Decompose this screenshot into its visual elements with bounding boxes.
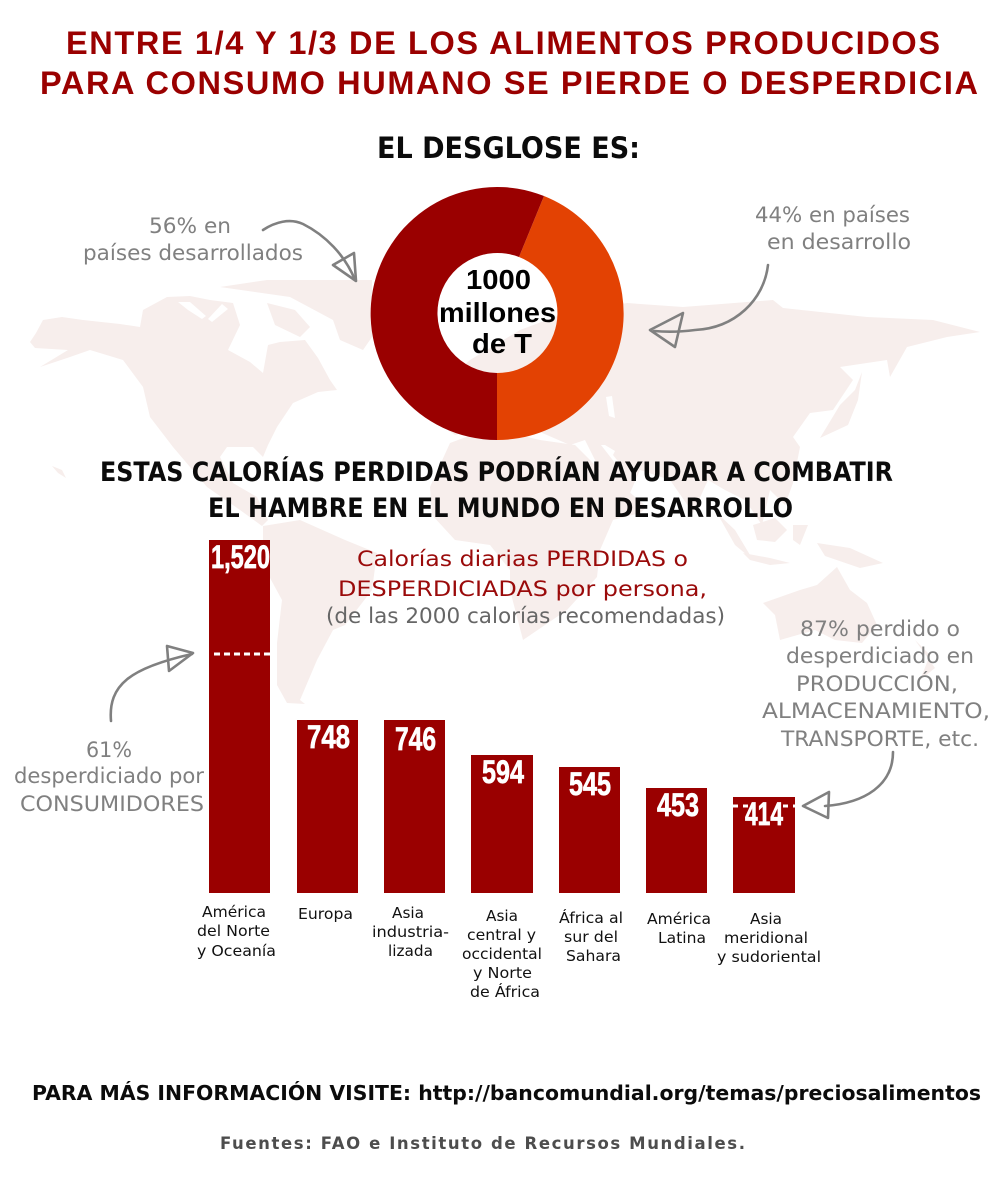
bar: Asia central y occidental y Norte de África <box>462 754 542 1001</box>
callout: 87%: ALMACENAMIENTO, <box>762 699 990 723</box>
chart subtitle: (de las 2000 calorías recomendadas) <box>326 604 725 628</box>
callout: 44%: en desarrollo <box>767 230 911 254</box>
bar: Europa <box>297 719 358 923</box>
callout: 44% <box>755 203 911 254</box>
bar chart <box>197 539 821 1001</box>
title: PARA CONSUMO HUMANO SE PIERDE O DESPERDICIA <box>40 65 978 101</box>
bar: Asia industrializada: industria- <box>372 923 449 941</box>
bar: América Latina: América <box>647 910 711 928</box>
bar: América Latina: Latina <box>658 929 706 947</box>
bar: Asia central y occidental y Norte de África: Asia <box>486 907 518 925</box>
chart subtitle <box>326 547 725 628</box>
callout: 61%: 61% <box>86 738 132 762</box>
bar: América del Norte y Oceanía <box>197 539 276 960</box>
title: ENTRE 1/4 Y 1/3 DE LOS ALIMENTOS PRODUCIDOS <box>66 25 940 61</box>
bar: Asia meridional y sudoriental <box>717 796 821 966</box>
callout: 87%: PRODUCCIÓN, <box>796 671 958 696</box>
callout: 61%: desperdiciado por <box>14 764 204 788</box>
donut center text: 1000 <box>466 264 531 295</box>
arrow: to donut left <box>263 221 356 281</box>
bar: Asia central y occidental y Norte de África: de África <box>470 982 540 1001</box>
bar: América del Norte y Oceanía: del Norte <box>197 922 270 940</box>
bar: África al sur del Sahara: África al <box>559 908 623 927</box>
donut center text: de T <box>472 328 532 359</box>
heading: calorías: ESTAS CALORÍAS PERDIDAS PODRÍAN AYUDAR A COMBATIR <box>100 456 893 488</box>
callout: 87% <box>762 617 990 751</box>
callout: 87%: desperdiciado en <box>786 644 974 668</box>
bar: Asia central y occidental y Norte de África: occidental <box>462 945 542 963</box>
bar: Asia central y occidental y Norte de África: y Norte <box>473 964 532 982</box>
bar: América del Norte y Oceanía: América <box>202 903 266 921</box>
heading: calorías: EL HAMBRE EN EL MUNDO EN DESARROLLO <box>208 493 793 524</box>
callout: 87%: 87% perdido o <box>800 617 960 641</box>
callout: 61%: CONSUMIDORES <box>20 792 204 816</box>
bar: América Latina <box>646 787 711 947</box>
footer link: PARA MÁS INFORMACIÓN VISITE: http://bancomundial.org/temas/preciosalimentos <box>32 1080 981 1105</box>
bar: Asia meridional y sudoriental: 414 <box>745 796 783 832</box>
bar: Asia central y occidental y Norte de África: 594 <box>482 754 524 790</box>
bar: África al sur del Sahara: sur del <box>564 928 618 946</box>
bar: Asia central y occidental y Norte de África: central y <box>467 926 536 944</box>
bar: Europa: 748 <box>307 719 350 755</box>
bar: Asia industrializada: Asia <box>392 904 424 922</box>
bar: América Latina: 453 <box>657 787 699 823</box>
donut chart <box>371 187 624 440</box>
bar: Asia meridional y sudoriental: y sudoriental <box>717 948 821 966</box>
arrow: to first bar <box>111 646 193 721</box>
bar: América del Norte y Oceanía: 1,520 <box>211 539 270 575</box>
bar: Asia industrializada: 746 <box>395 721 436 757</box>
callout: 56% <box>83 214 303 265</box>
bar: Asia meridional y sudoriental: meridional <box>724 929 808 947</box>
heading: calorías <box>100 456 893 524</box>
sources: Fuentes: FAO e Instituto de Recursos Mundiales. <box>220 1134 745 1153</box>
bar: Asia meridional y sudoriental: Asia <box>750 910 782 928</box>
callout: 87%: TRANSPORTE, etc. <box>780 727 979 751</box>
callout: 61% <box>14 738 204 816</box>
bar: África al sur del Sahara: 545 <box>569 766 611 802</box>
callout: 44%: 44% en países <box>755 203 910 227</box>
bar: América del Norte y Oceanía: y Oceanía <box>197 942 276 960</box>
title <box>40 25 978 101</box>
callout: 56%: países desarrollados <box>83 241 303 265</box>
world map background <box>30 280 980 704</box>
bar: Asia industrializada <box>372 720 449 960</box>
donut center text: millones <box>439 297 556 328</box>
bar: África al sur del Sahara <box>559 766 623 965</box>
donut center text <box>439 264 556 359</box>
chart subtitle: Calorías diarias PERDIDAS o <box>357 547 688 571</box>
bar: África al sur del Sahara: Sahara <box>566 947 621 965</box>
heading: el desglose: EL DESGLOSE ES: <box>377 131 640 165</box>
arrow: to last bar <box>803 752 893 818</box>
callout: 56%: 56% en <box>149 214 231 238</box>
bar: Europa: Europa <box>298 905 353 923</box>
chart subtitle: DESPERDICIADAS por persona, <box>338 577 707 601</box>
arrow: to donut right <box>650 265 768 347</box>
bar: Asia industrializada: lizada <box>388 942 433 960</box>
